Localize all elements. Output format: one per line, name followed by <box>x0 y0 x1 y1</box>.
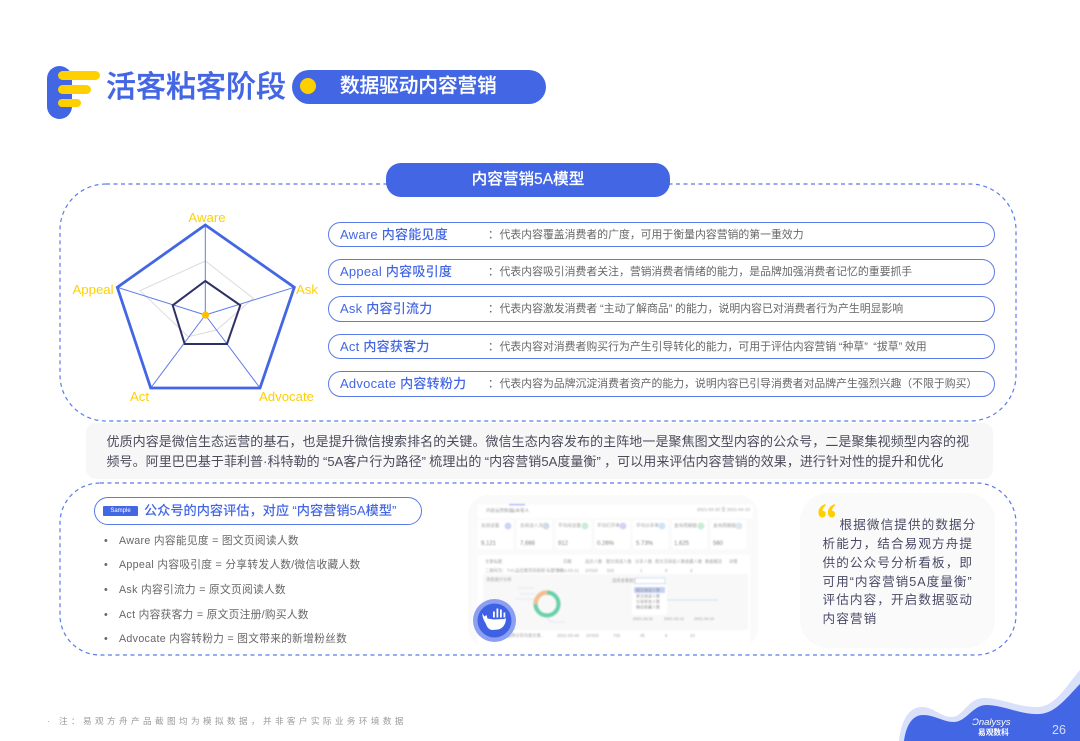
row: Advocate: ： <box>488 378 499 390</box>
metric list: • <box>104 609 108 621</box>
callout: quote card <box>800 493 995 648</box>
radar chart: Advocate <box>259 389 314 404</box>
dashboard screenshot: 详情 <box>729 558 738 565</box>
footer brand <box>972 717 1011 737</box>
radar chart <box>72 210 318 404</box>
model heading pill <box>386 163 670 197</box>
heading text: 公众号的内容评估，对应“内容营销5A模型” <box>144 503 396 518</box>
dashboard screenshot: 数据概览 <box>705 558 723 565</box>
row: Act <box>328 334 995 359</box>
sample tag: Sample <box>110 508 131 514</box>
subtitle pill <box>292 70 546 104</box>
metric list <box>104 534 360 645</box>
dashboard screenshot: 5.73% <box>636 541 654 547</box>
dashboard screenshot: 内容运营数据 <box>486 507 513 514</box>
radar chart: Appeal <box>72 282 114 297</box>
text block: summary <box>86 423 993 479</box>
dashboard screenshot: 分享人数 <box>635 558 653 565</box>
dashboard screenshot: 725 <box>613 633 621 638</box>
dashboard screenshot: 图文阅读人数 <box>636 586 660 592</box>
footer brand: Ɔnalysys <box>972 717 1011 728</box>
row: Ask: Ask 内容引流力 <box>340 301 433 316</box>
dashboard screenshot: 查询周期图 <box>674 522 697 529</box>
dashboard screenshot: 收藏人数 <box>685 558 703 565</box>
row: Aware <box>328 222 995 247</box>
dashboard screenshot: 消息统计分析 <box>486 576 512 583</box>
quote text: 析能力，结合易观方舟提 <box>822 537 973 551</box>
quote text: 根据微信提供的数据分 <box>840 518 976 532</box>
dashboard screenshot: 23'020 <box>586 633 599 638</box>
row: Ask: 代表内容激发消费者“主动了解商品”的能力，说明内容已对消费者行为产生明显影响 <box>500 303 903 315</box>
dashboard screenshot: 0.26% <box>597 541 615 547</box>
dashboard screenshot: 分享转发人数 <box>636 598 660 604</box>
dashboard screenshot: 送达人数 <box>585 558 603 565</box>
dashboard screenshot: 6 <box>665 633 668 638</box>
dashboard screenshot: 图文阅读人数 <box>636 577 662 584</box>
dashboard screenshot: 1 <box>640 568 643 573</box>
metric list: • <box>104 633 108 645</box>
row: Ask: ： <box>488 303 499 315</box>
dashboard screenshot: 45 <box>640 633 645 638</box>
dashboard screenshot: 3 <box>690 568 693 573</box>
title: 活客粘客阶段 <box>106 71 286 104</box>
row: Aware: 代表内容覆盖消费者的广度，可用于衡量内容营销的第一重效力 <box>500 228 804 240</box>
metric list: Advocate 内容转粉力 = 图文带来的新增粉丝数 <box>119 633 347 645</box>
dashboard screenshot: 2021.04.10 <box>694 616 715 621</box>
row: Appeal <box>328 259 995 284</box>
dashboard screenshot: 平均分享率 <box>636 522 659 529</box>
dashboard screenshot: 公众号人 <box>511 508 529 514</box>
text block: summary: 频号。阿里巴巴基于菲利普·科特勒的“5A客户行为路径”梳理出的“内容营销5A度量衡”，可以用来评估内容营销的效果，进行针对性的提升和优化 <box>106 454 943 469</box>
quote text: 供的公众号分析看板，即 <box>822 556 973 570</box>
quote text <box>822 518 976 626</box>
row: Aware: Aware 内容能见度 <box>340 226 448 242</box>
dashboard screenshot: 平均阅读量 <box>558 522 581 529</box>
footnote: · 注：易观方舟产品截图均为模拟数据，并非客户实际业务环境数据 <box>47 716 407 726</box>
dashboard screenshot: 二维码为：TVC品位微笑短视频 标题等待... <box>485 567 567 574</box>
dashboard screenshot: 微信收藏人数 <box>636 604 660 610</box>
logo icon <box>47 66 100 119</box>
pill dot <box>300 78 316 94</box>
quote text: 可用“内容营销5A度量衡” <box>822 575 973 589</box>
dashboard screenshot: 二维码为：品牌分享内容文章... <box>485 632 544 639</box>
footer wave <box>899 670 1080 741</box>
row: Advocate: Advocate 内容转粉力 <box>340 376 466 391</box>
dashboard screenshot <box>480 503 751 639</box>
row: Act: Act 内容获客力 <box>340 338 430 354</box>
dashboard screenshot: 图文阅读人数 <box>606 558 632 565</box>
dashboard screenshot: 2021.03.31 <box>633 616 654 621</box>
dashboard screenshot: 查询周期图 <box>713 522 736 529</box>
radar chart: Act <box>130 389 149 404</box>
dashboard screenshot: 2021-03-21 <box>557 568 580 573</box>
dashboard screenshot: 总阅读人次 <box>520 522 543 529</box>
quote text: 评估内容，开启数据驱动 <box>822 593 973 607</box>
dashboard screenshot: 总阅读量 <box>481 522 500 529</box>
metric list: • <box>104 535 108 547</box>
icon: quote mark <box>818 504 836 518</box>
dashboard screenshot: 560 <box>713 541 724 547</box>
dashboard screenshot: 0 <box>665 568 668 573</box>
row: Appeal: Appeal 内容吸引度 <box>340 264 452 279</box>
row: Advocate <box>328 371 995 396</box>
dashboard screenshot: 1,625 <box>674 541 690 547</box>
radar chart: Ask <box>296 282 318 297</box>
row: Ask <box>328 296 995 322</box>
dashboard screenshot: 7,666 <box>520 541 536 547</box>
dashboard screenshot: 912 <box>558 541 569 547</box>
row: Aware: ： <box>488 228 499 240</box>
dashboard screenshot: 525 <box>607 568 615 573</box>
text block: summary: 优质内容是微信生态运营的基石，也是提升微信搜索排名的关键。微信生态内容发布的主阵地一是聚焦图文型内容的公众号，二是聚集视频型内容的视 <box>106 434 969 449</box>
metric list: • <box>104 584 108 596</box>
pill text: 数据驱动内容营销 <box>340 75 497 97</box>
metric list: • <box>104 559 108 571</box>
dashboard screenshot: 平均打开率 <box>597 522 620 529</box>
model heading pill: 内容营销5A模型 <box>472 171 584 188</box>
sample tag <box>103 506 138 516</box>
dashboard screenshot: 文章标题 <box>485 558 503 565</box>
row: Appeal: 代表内容吸引消费者关注，营销消费者情绪的能力，是品牌加强消费者记忆的重要抓手 <box>500 266 912 278</box>
dashboard screenshot: 原文阅读人数 <box>636 592 660 598</box>
dashboard screenshot: 23'020 <box>585 568 598 573</box>
metric list: Appeal 内容吸引度 = 分享转发人数/微信收藏人数 <box>119 559 360 571</box>
evaluation heading pill <box>94 497 422 525</box>
metric list: Act 内容获客力 = 原文页注册/购买人数 <box>119 609 309 621</box>
row: Act: ： <box>488 340 499 352</box>
page number: 26 <box>1052 723 1066 737</box>
dashboard screenshot: 原文页阅读人数 <box>655 558 686 565</box>
dashboard screenshot: 9,121 <box>481 541 497 547</box>
dashboard screenshot: 24 <box>690 633 695 638</box>
row: Advocate: 代表内容为品牌沉淀消费者资产的能力，说明内容已引导消费者对品牌产生强烈兴趣（不限于购买） <box>500 378 977 390</box>
icon: whale badge <box>473 599 516 642</box>
metric list: Aware 内容能见度 = 图文页阅读人数 <box>119 535 299 547</box>
radar chart: Aware <box>188 210 226 225</box>
dashboard screenshot: 选择查看趋势 <box>612 577 638 584</box>
dashboard screenshot: 2021-03-40 <box>557 633 580 638</box>
footer brand: 易观数科 <box>978 728 1009 737</box>
dashboard screenshot: 2021.03.12 <box>664 616 685 621</box>
dashboard screenshot: 日期 <box>563 559 572 565</box>
row: Act: 代表内容对消费者购买行为产生引导转化的能力，可用于评估内容营销“种草” “拔草”效用 <box>500 340 927 352</box>
quote text: 内容营销 <box>822 612 877 626</box>
dashboard screenshot: 2021-03-20 至 2021-04-10 <box>697 507 751 512</box>
row: Appeal: ： <box>488 266 499 278</box>
metric list: Ask 内容引流力 = 原文页阅读人数 <box>119 584 286 596</box>
